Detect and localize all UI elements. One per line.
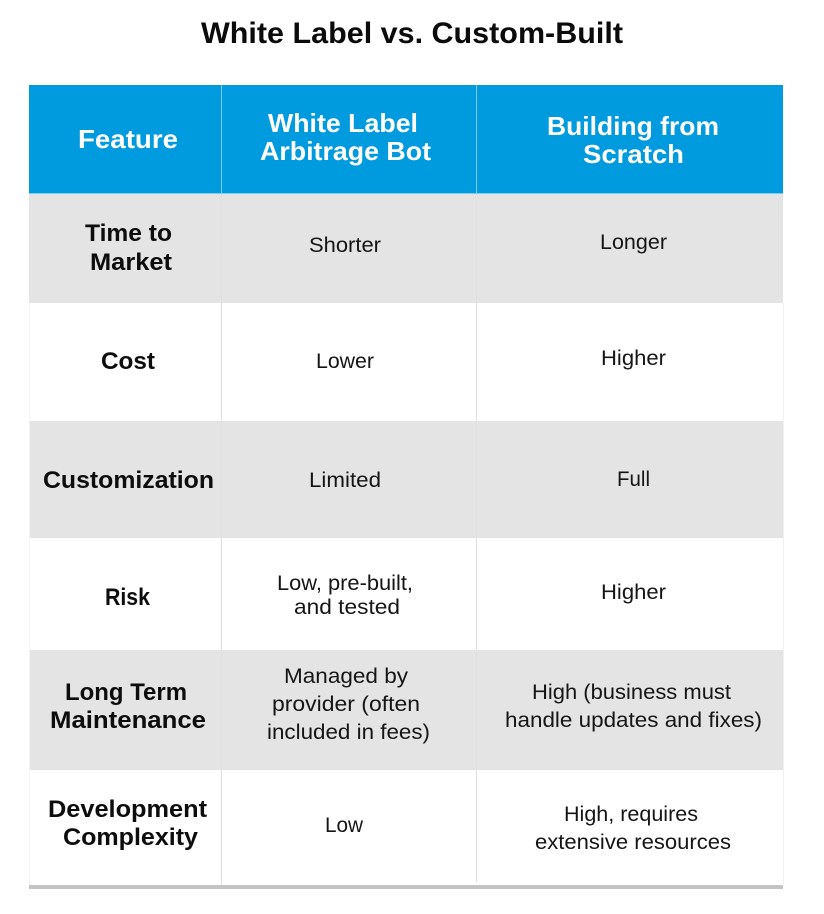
row: time to market: [29, 194, 783, 303]
row: development complexity: Development: [48, 796, 207, 823]
row: customization: [29, 421, 783, 538]
row: risk: [29, 538, 783, 650]
row: customization: Full: [617, 468, 650, 491]
row: long term maintenance: included in fees): [267, 721, 430, 744]
row: cost: [29, 303, 783, 421]
header: building from scratch: Scratch: [583, 139, 684, 169]
header: building from scratch: [547, 111, 719, 169]
row: customization: Limited: [309, 469, 381, 492]
row: risk: Risk: [105, 584, 151, 611]
row: cost: Higher: [601, 347, 666, 370]
row: long term maintenance: Maintenance: [50, 707, 206, 734]
table bottom shadow: [29, 884, 783, 889]
row: risk: and tested: [294, 596, 400, 619]
row: time to market: Time to: [85, 220, 172, 247]
row: long term maintenance: provider (often: [272, 693, 420, 716]
row: customization: Customization: [43, 467, 214, 494]
row: risk: Low, pre-built,: [277, 572, 413, 595]
header: feature: Feature: [78, 124, 178, 154]
header: building from scratch: Building from: [547, 111, 719, 141]
header: white label arbitrage bot: White Label: [268, 108, 418, 138]
row: long term maintenance: High (business must: [532, 681, 731, 704]
row: long term maintenance: Long Term: [65, 679, 187, 706]
row: development complexity: Complexity: [63, 824, 199, 851]
row: risk: Higher: [601, 581, 666, 604]
row: development complexity: Low: [325, 814, 364, 837]
row: long term maintenance: Managed by: [284, 665, 409, 688]
header: white label arbitrage bot: Arbitrage Bot: [260, 136, 431, 166]
row: time to market: Market: [90, 249, 172, 276]
row: long term maintenance: handle updates and fixes): [505, 709, 762, 732]
table header row: [29, 85, 783, 194]
row: development complexity: extensive resources: [535, 831, 731, 854]
row: development complexity: [29, 770, 783, 885]
row: time to market: Longer: [600, 231, 667, 254]
row: long term maintenance: [29, 650, 783, 770]
row: time to market: Shorter: [309, 234, 381, 257]
title: White Label vs. Custom-Built: [201, 17, 623, 50]
row: cost: Lower: [316, 350, 374, 373]
row: development complexity: High, requires: [564, 803, 698, 826]
header: white label arbitrage bot: [260, 108, 431, 166]
row: cost: Cost: [101, 348, 155, 375]
